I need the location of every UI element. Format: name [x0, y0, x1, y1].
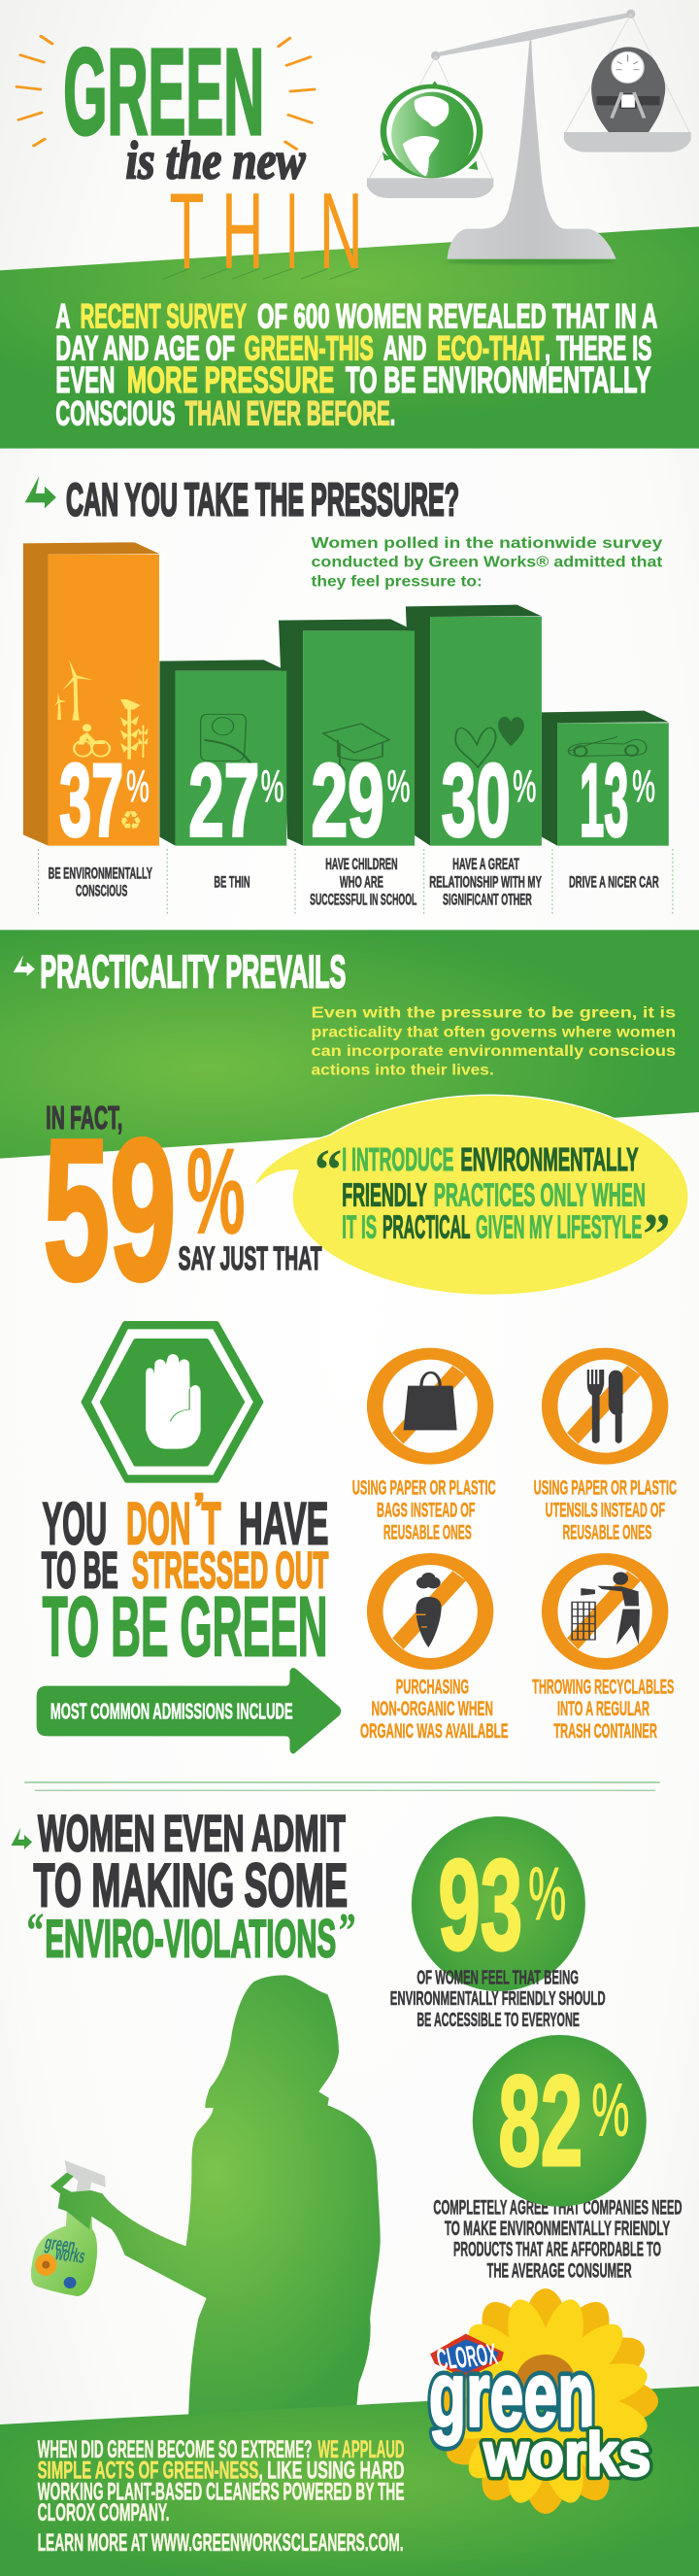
heading: you don't have to be stressed out to be green — [42, 1490, 329, 1675]
bar: environmentally conscious 37% — [23, 542, 159, 859]
logo: clorox diamond — [430, 2334, 504, 2378]
text block: intro paragraph: A — [55, 297, 71, 336]
arrow: most common admissions include — [37, 1668, 341, 1753]
panel: header: GREEN — [63, 24, 264, 160]
text block: admission captions: PURCHASING — [396, 1676, 469, 1698]
bar labels: SUCCESSFUL IN SCHOOL — [310, 892, 416, 909]
icon: recycle: ♻ — [119, 805, 142, 836]
icon: stop hand hexagon — [84, 1324, 260, 1480]
bar labels: HAVE CHILDREN — [325, 856, 398, 873]
shadows under THIN — [163, 269, 359, 279]
stat: 93% circle: % — [528, 1851, 566, 1936]
panel: can you take the pressure — [23, 474, 673, 915]
text block: intro paragraph: GREEN-THIS — [245, 329, 374, 368]
panel: practicality prevails — [0, 930, 699, 1322]
bar chart: pressure percentages: % — [261, 761, 284, 811]
panel: you don't have to be stressed out — [37, 1324, 677, 1753]
panel: women even admit — [11, 1782, 660, 2207]
heading: women even admit: ” — [339, 1903, 355, 1957]
bar labels: BE ENVIRONMENTALLY — [49, 864, 152, 882]
text block: closing message — [38, 2436, 404, 2557]
bar: relationship 30%: % — [513, 761, 536, 811]
text block: intro paragraph: DAY AND AGE OF — [55, 329, 235, 368]
icon: bent arrow — [25, 476, 56, 508]
bar labels: BE THIN — [214, 873, 250, 891]
panel: you don't have to be stressed out: HAVE — [239, 1490, 328, 1557]
bar labels: WHO ARE — [340, 873, 383, 891]
bottom green band — [0, 2387, 699, 2576]
bar labels: HAVE A GREAT — [452, 856, 519, 873]
green band — [0, 930, 699, 1159]
icon: no littering trash — [549, 1559, 660, 1664]
callout: speech bubble quote: “ — [315, 1137, 342, 1203]
green intro band — [0, 226, 699, 449]
icon: no non-organic carrot — [375, 1559, 485, 1664]
heading: you don't have to be stressed out to be green: TO BE — [42, 1542, 118, 1599]
bar: drive a nicer car 13% — [542, 711, 669, 859]
icon: wind turbines, cyclist, plants — [54, 660, 148, 760]
bar: children 29% — [279, 619, 415, 859]
text block: intro paragraph: EVEN — [55, 359, 115, 400]
icon: no plastic utensils — [549, 1354, 660, 1459]
icon: no paper bags — [375, 1354, 485, 1459]
icon: orange rays around title — [17, 36, 315, 149]
bar labels: RELATIONSHIP WITH MY — [429, 873, 542, 891]
text block: 82% caption — [433, 2196, 682, 2282]
heading: women even admit — [27, 1806, 355, 1969]
bar labels: CONSCIOUS — [76, 883, 127, 900]
icon: white arrow — [14, 955, 35, 976]
heading: you don't have to be stressed out to be green: DON — [126, 1490, 191, 1557]
bar: drive a nicer car 13%: % — [632, 761, 655, 811]
text block: admission captions — [352, 1476, 677, 1743]
panel: practicality prevails: IN FACT, — [46, 1100, 122, 1135]
stat: 82% circle: 82 — [498, 2049, 582, 2192]
title: THIN: H — [221, 171, 263, 291]
panel: footer band and woman silhouette: , LIKE USING HARD — [258, 2457, 404, 2484]
text block: intro paragraph: AND — [383, 329, 426, 368]
text block: admission captions: REUSABLE ONES — [383, 1521, 472, 1543]
panel: practicality prevails: % — [186, 1123, 246, 1259]
text block: intro paragraph: ECO-THAT — [437, 329, 544, 368]
logo: green — [429, 2343, 595, 2446]
stat: 93% circle: 93 — [438, 1832, 522, 1977]
text block: intro paragraph — [55, 297, 657, 433]
text block: practicality intro: actions into their lives. — [312, 1062, 494, 1079]
text block: admission captions: BAGS INSTEAD OF — [377, 1499, 476, 1521]
bar: environmentally conscious 37%: % — [126, 761, 150, 811]
bar labels: SIGNIFICANT OTHER — [443, 892, 532, 909]
panel: footer band and woman silhouette — [0, 1975, 699, 2576]
text block: intro paragraph: RECENT SURVEY — [81, 297, 247, 336]
icon: balance scale — [367, 10, 691, 265]
panel: header: N — [319, 171, 363, 291]
bar: be thin 27% — [159, 660, 286, 859]
icon: spray bottle: works — [52, 2243, 87, 2268]
callout: speech bubble quote: IT IS — [342, 1208, 377, 1245]
bar: relationship 30%: 30 — [442, 743, 511, 859]
text block: admission captions: NON-ORGANIC WHEN — [372, 1698, 493, 1720]
logo: clorox green works — [429, 2334, 650, 2489]
stat: 59% — [44, 1098, 246, 1322]
panel: practicality prevails: SAY JUST THAT — [179, 1238, 322, 1276]
stat: 59%: 59 — [44, 1098, 176, 1322]
panel: footer band and woman silhouette: WE APPLAUD — [317, 2436, 404, 2463]
stat: 82% circle — [473, 2035, 647, 2207]
callout: speech bubble quote: ” — [643, 1202, 671, 1267]
panel: you don't have to be stressed out: STRESSED OUT — [132, 1542, 329, 1599]
text block: intro paragraph: CONSCIOUS — [55, 394, 175, 433]
bar: children 29%: 29 — [312, 743, 384, 859]
stat: 82% circle: % — [591, 2068, 629, 2152]
text block: survey intro: they feel pressure to: — [312, 573, 483, 590]
text block: intro paragraph: . — [390, 394, 395, 433]
callout: speech bubble quote: PRACTICAL — [383, 1208, 470, 1245]
text block: 93% caption — [390, 1967, 606, 2031]
double hand-drawn rule — [24, 1782, 660, 1790]
logo: clorox green works: CLOROX — [434, 2337, 500, 2376]
panel: header — [0, 10, 699, 449]
woman silhouette — [50, 1975, 381, 2416]
heading: you don't have to be stressed out to be green: T — [202, 1490, 221, 1557]
bar: environmentally conscious 37%: 37 — [59, 743, 123, 859]
stat: 93% circle — [412, 1816, 585, 1991]
bar chart: pressure percentages: % — [387, 761, 410, 811]
heading: women even admit: “ — [27, 1903, 44, 1957]
callout: speech bubble quote — [253, 1095, 688, 1295]
text block: practicality intro — [312, 1004, 676, 1079]
logo: sunflower — [433, 2288, 658, 2514]
text block: closing message: CLOROX COMPANY. — [38, 2499, 169, 2526]
text block: intro paragraph: THAN EVER BEFORE — [185, 394, 390, 433]
text block: closing message: SIMPLE ACTS OF GREEN-NESS — [38, 2457, 258, 2484]
icon: globe — [383, 81, 480, 178]
bar labels — [38, 849, 673, 915]
bar: relationship 30% — [406, 605, 542, 859]
icon: bathroom scale weight — [591, 47, 665, 132]
icon: spray bottle: green — [43, 2232, 78, 2257]
icon: spray bottle — [31, 2160, 106, 2296]
heading: you don't have to be stressed out to be green: YOU — [43, 1490, 107, 1557]
title: THIN: I — [285, 171, 299, 291]
bar chart: pressure percentages — [23, 542, 669, 859]
panel: you don't have to be stressed out: MOST COMMON ADMISSIONS INCLUDE — [50, 1699, 293, 1724]
callout: speech bubble quote: I INTRODUCE — [342, 1140, 453, 1177]
icon: bent arrow — [11, 1828, 32, 1849]
title: is the new: is the new — [125, 131, 306, 190]
title: THIN — [169, 171, 363, 291]
text block: intro paragraph: MORE PRESSURE — [127, 359, 334, 400]
bar: be thin 27%: 27 — [188, 743, 259, 859]
text block: survey intro — [312, 535, 663, 590]
title: THIN: T — [169, 171, 204, 291]
callout: speech bubble quote: FRIENDLY — [342, 1176, 427, 1213]
